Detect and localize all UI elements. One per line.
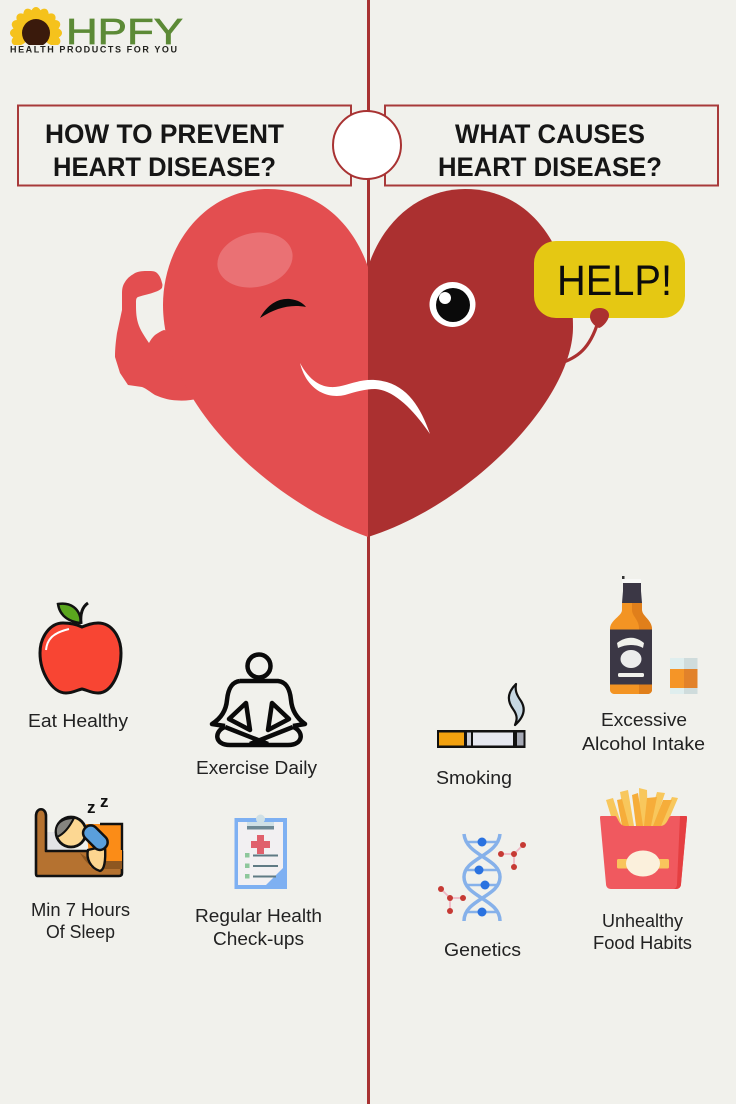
helper hand [590,308,609,328]
centre circle [333,111,401,179]
speech bubble: HELP! [557,257,672,305]
icon: bottle and glass [610,576,698,694]
icon: cigarette [437,684,526,748]
icon: person asleep in bed: z [100,792,108,811]
logo [6,7,183,55]
item: unhealthy food [593,788,692,953]
icon: fries [600,788,687,889]
highlight [212,226,298,294]
mouth [300,363,430,434]
label [593,911,692,953]
icon: apple [40,603,121,693]
icon: meditating figure [212,654,305,745]
label: Check-ups [213,929,304,949]
item: eat healthy [28,603,128,731]
panel: causes heading: HEART DISEASE? [438,152,662,182]
item: health check-ups [195,814,322,949]
left heart half [163,189,368,537]
heart character [115,189,685,537]
label: Genetics [444,940,521,960]
item: smoking [436,684,526,788]
icon: dna [438,834,526,921]
label [31,900,130,942]
item: genetics [438,834,526,960]
icon: clipboard [234,814,287,889]
icon: sunflower [6,7,66,55]
label: Food Habits [593,933,692,953]
label: Eat Healthy [28,711,128,731]
winking eye [260,299,306,318]
label: Of Sleep [46,922,115,942]
panel: causes heading [385,106,718,186]
right helper arm [558,322,598,364]
panel: causes heading: WHAT CAUSES [455,119,645,149]
label: Smoking [436,768,512,788]
label: Excessive [601,710,687,730]
logo wordmark: HPFY [66,11,183,52]
flexed arm [115,271,200,401]
right heart half [368,189,573,537]
item: alcohol [582,576,705,754]
label: Min 7 Hours [31,900,130,920]
icon: person asleep in bed [36,792,122,876]
panel: prevent heading [18,106,351,186]
logo tagline: HEALTH PRODUCTS FOR YOU [10,44,177,54]
panel: prevent heading: HOW TO PREVENT [45,119,284,149]
item: sleep [31,792,130,942]
icon: person asleep in bed: z [87,798,96,817]
label [582,710,705,754]
panel: prevent heading: HEART DISEASE? [53,152,276,182]
label: Unhealthy [602,911,683,931]
label: Alcohol Intake [582,734,705,754]
label [195,906,322,949]
speech bubble [534,241,685,318]
label: Exercise Daily [196,758,317,778]
open eye [430,282,476,327]
label: Regular Health [195,906,322,926]
item: exercise daily [196,654,317,778]
